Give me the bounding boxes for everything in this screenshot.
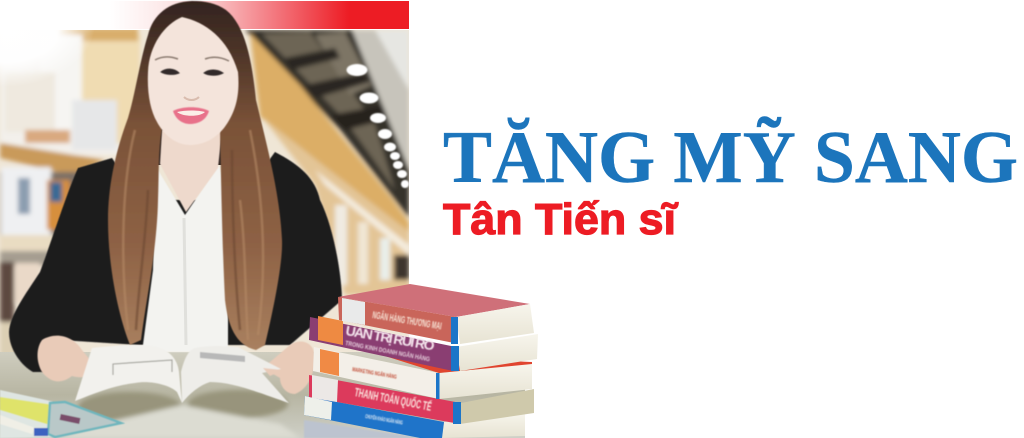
book 1: red top xyxy=(338,284,534,344)
long brown hair xyxy=(108,1,282,350)
table reflection of book stack xyxy=(304,420,420,438)
eyebrows and eyes xyxy=(155,57,229,75)
subtitle: Tân Tiến sĩ xyxy=(443,195,679,244)
black blazer xyxy=(9,152,342,372)
faded top-left corner xyxy=(0,30,92,80)
left page xyxy=(75,345,182,403)
right page image xyxy=(200,352,245,362)
left wooden shelf xyxy=(0,143,105,176)
name heading: TĂNG MỸ SANG xyxy=(443,116,1018,199)
face xyxy=(148,17,238,145)
teeth xyxy=(177,110,205,116)
neck shadow behind hair xyxy=(150,105,240,165)
left book covers xyxy=(1,167,51,235)
shirt placket shadow xyxy=(184,218,186,345)
book 4 title: THANH TOÁN QUỐC TẾ xyxy=(353,384,433,414)
right bookshelves xyxy=(262,117,409,295)
ceiling xyxy=(245,30,409,218)
book 2 subtitle: TRONG KINH DOANH NGÂN HÀNG xyxy=(345,338,431,363)
book 1 title: NGÂN HÀNG THƯƠNG MẠI xyxy=(372,308,443,333)
book 3 title: MARKETING NGÂN HÀNG xyxy=(352,366,397,381)
book 2: purple xyxy=(309,316,538,371)
woman portrait xyxy=(9,1,342,394)
white shirt xyxy=(142,165,228,352)
book 5 title: CHUYÊN KHẢO NGÂN HÀNG xyxy=(365,412,404,427)
left wall display xyxy=(0,66,118,159)
pencil case xyxy=(0,390,122,438)
red gradient banner xyxy=(110,1,409,29)
ceiling beam xyxy=(352,30,409,170)
left page figure xyxy=(113,360,172,375)
right page xyxy=(181,346,289,403)
table top xyxy=(0,352,525,438)
book stack xyxy=(304,284,538,438)
hair highlight strands xyxy=(123,130,263,340)
bookstore background photo xyxy=(0,30,409,352)
right hand xyxy=(263,341,314,394)
book 3: white and orange xyxy=(313,347,532,399)
book 2 title: UẢN TRỊ RỦI RO xyxy=(344,321,436,354)
book 4: pink xyxy=(309,375,534,424)
left hand xyxy=(38,336,100,381)
book thumb xyxy=(263,368,282,376)
ceiling lights xyxy=(346,64,409,188)
nose xyxy=(184,97,199,100)
table reflection of book underside xyxy=(60,390,300,438)
right wooden shelf band xyxy=(250,33,409,232)
book 5: blue xyxy=(304,396,525,438)
open book xyxy=(75,345,289,403)
neck xyxy=(160,130,222,212)
smile xyxy=(173,107,209,124)
